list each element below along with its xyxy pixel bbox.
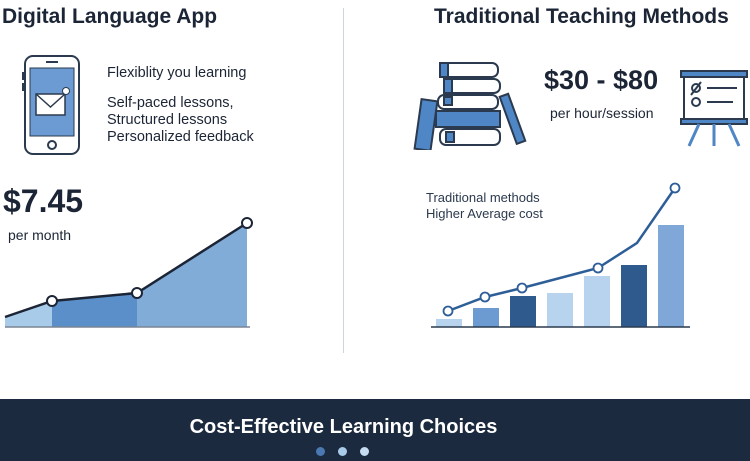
text: features: Structured lessons (107, 112, 227, 128)
chart: traditional bars (431, 182, 690, 328)
text: traditional note (426, 190, 543, 221)
footer (0, 399, 750, 461)
text: traditional note: Traditional methods (426, 190, 540, 205)
title: right: Traditional Teaching Methods (434, 5, 729, 28)
panel: digital app (3, 55, 254, 243)
text: features: Personalized feedback (107, 129, 254, 145)
icon: books (414, 62, 526, 150)
text: traditional note: Higher Average cost (426, 206, 543, 221)
footer title: Cost-Effective Learning Choices (190, 416, 497, 438)
price: traditional: $30 - $80 (544, 65, 658, 95)
divider (343, 8, 344, 353)
text: features (107, 65, 254, 145)
pagination dots (316, 447, 369, 456)
price: app: $7.45 (3, 183, 83, 219)
title: left: Digital Language App (2, 5, 217, 28)
icon: phone (22, 55, 80, 155)
label: per hour: per hour/session (550, 105, 654, 121)
text: features: Flexiblity you learning Self-paced lessons, (107, 65, 246, 111)
label: per month: per month (8, 227, 71, 243)
chart: app area (4, 217, 253, 328)
icon: easel (680, 70, 748, 147)
